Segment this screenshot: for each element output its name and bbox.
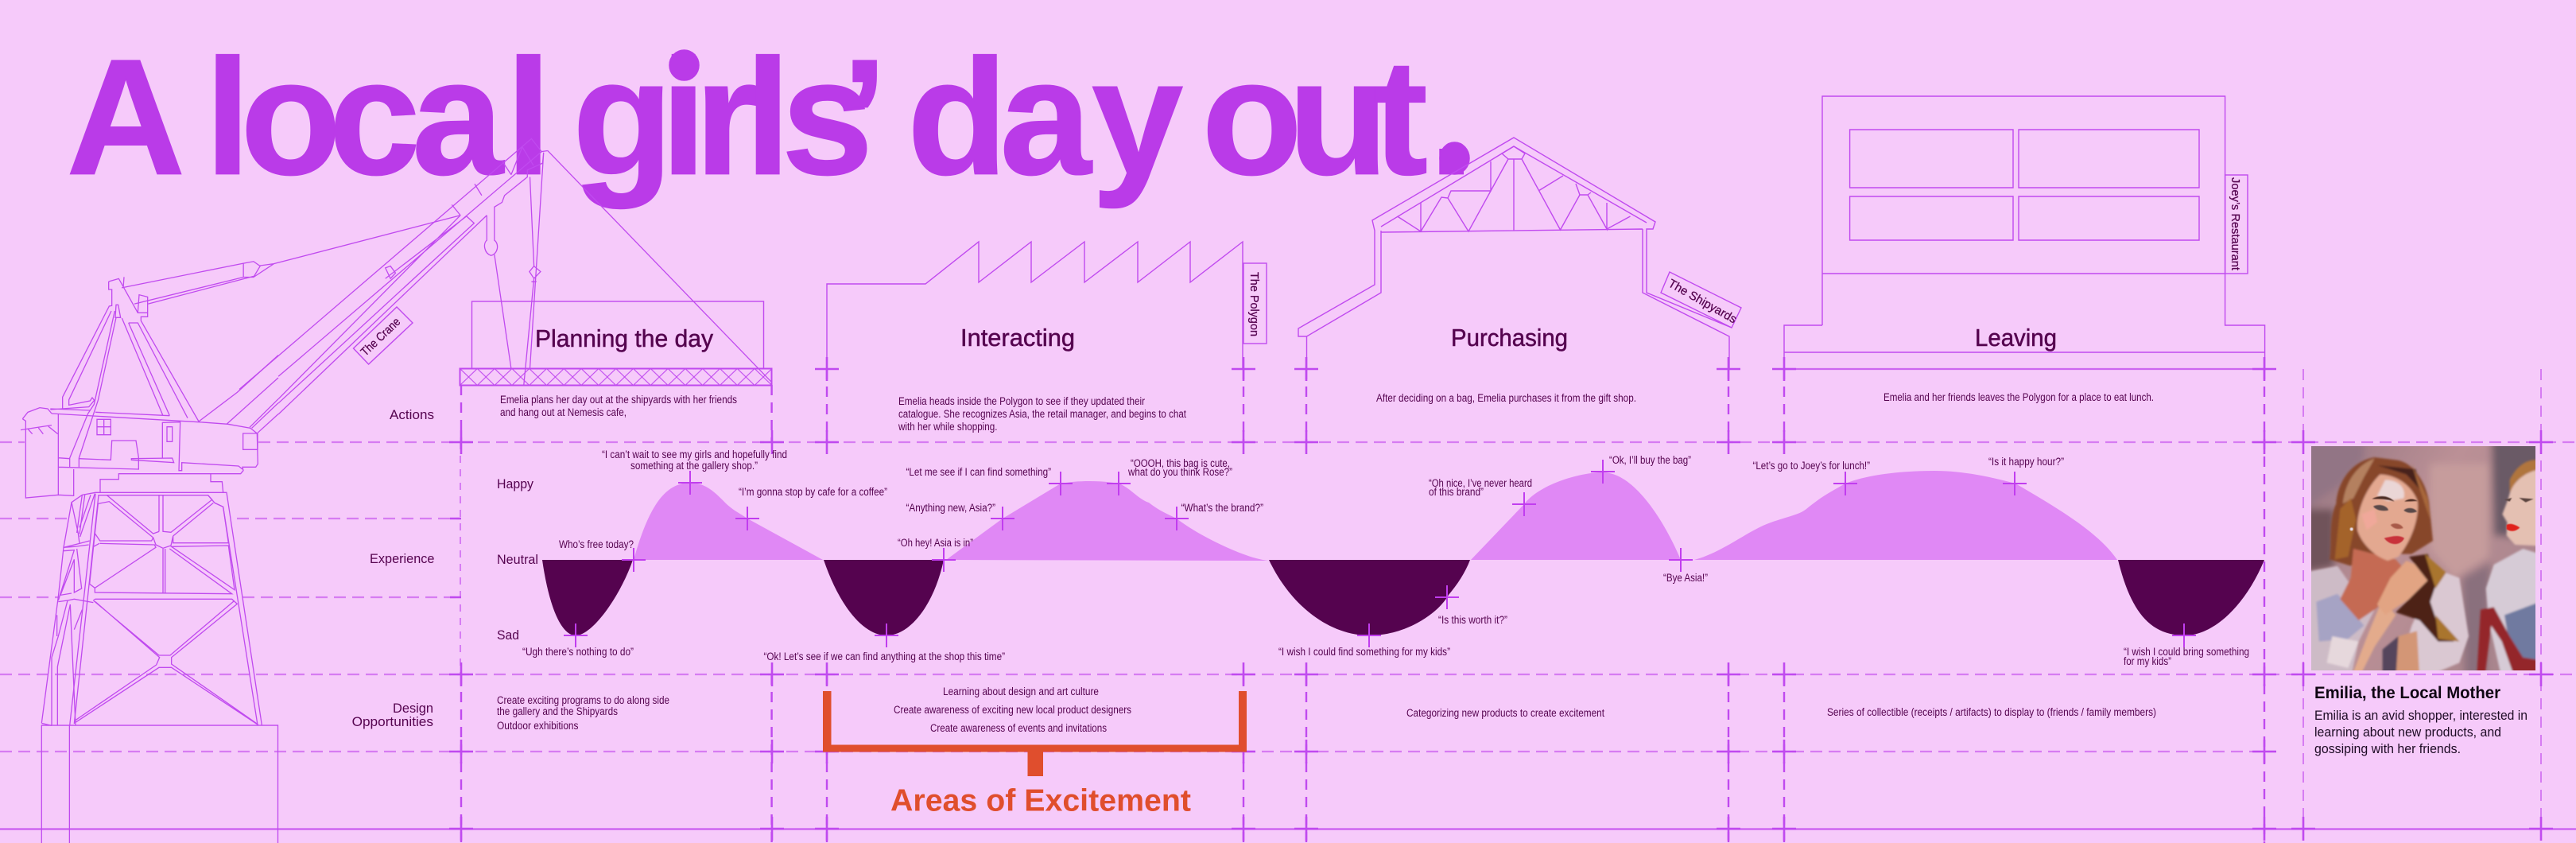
label: experience: Experience	[370, 551, 434, 566]
quote: interacting	[763, 457, 1263, 662]
action: interacting: with her while shopping.	[898, 421, 997, 433]
opportunity: purchasing: Categorizing new products to create excitement	[1406, 707, 1604, 719]
title: A	[67, 25, 185, 209]
quote: interacting: “Oh hey! Asia is in”	[898, 537, 973, 549]
quote: purchasing: “Is this worth it?”	[1438, 614, 1507, 626]
quote: leaving: “Let’s go to Joey’s for lunch!”	[1752, 460, 1870, 472]
crane tower	[41, 492, 262, 725]
action: leaving: Emelia and her friends leaves the Polygon for a place to eat lunch.	[1884, 391, 2154, 403]
panel: leaving	[1784, 96, 2265, 368]
opportunity: planning: Create exciting programs to do along side	[497, 694, 669, 706]
actions text	[500, 391, 2154, 433]
negative areas	[542, 560, 2264, 635]
quote: leaving	[1752, 456, 2249, 667]
action: interacting	[898, 395, 1186, 433]
panel: planning the day	[460, 301, 771, 385]
painted background	[2311, 446, 2535, 670]
quote: interacting: what do you think Rose?”	[1127, 466, 1232, 478]
persona caption	[2314, 683, 2528, 756]
opportunity: interacting: Create awareness of events and invitations	[930, 722, 1107, 734]
label: actions: Actions	[390, 407, 434, 422]
opportunity: interacting: Create awareness of exciting new local product designers	[894, 704, 1131, 716]
quote: interacting: “Ok! Let’s see if we can find anything at the shop this time”	[763, 651, 1005, 662]
persona description: learning about new products, and	[2314, 725, 2501, 740]
quote: planning: “I can’t wait to see my girls and hopefully find	[602, 449, 787, 460]
label: neutral: Neutral	[497, 552, 538, 567]
persona description: Emilia is an avid shopper, interested in	[2314, 709, 2528, 723]
second figure details	[2504, 498, 2534, 531]
sign: the shipyards: The Shipyards	[1666, 277, 1739, 326]
action: planning: Emelia plans her day out at the shipyards with her friends	[500, 394, 737, 406]
heading: Planning the day	[535, 324, 713, 352]
positive areas	[634, 471, 2117, 561]
lattice platform	[460, 369, 771, 385]
quote: purchasing: “I wish I could find something for my kids”	[1278, 646, 1450, 658]
planning box	[472, 301, 763, 369]
sign: The Crane: The Crane	[359, 315, 403, 359]
panel: purchasing	[1298, 138, 1741, 368]
callout label: Areas of Excitement	[890, 784, 1191, 818]
quote: leaving: “Is it happy hour?”	[1988, 456, 2064, 468]
action: interacting: catalogue. She recognizes Asia, the retail manager, and begins to chat	[898, 408, 1186, 420]
title: local	[205, 25, 552, 209]
design opportunities text	[497, 686, 2156, 734]
persona name: Emilia, the Local Mother	[2314, 683, 2501, 702]
face	[2357, 475, 2418, 561]
label: design opportunities: Opportunities	[352, 714, 433, 729]
action: planning: and hang out at Nemesis cafe,	[500, 406, 627, 418]
quote: interacting: “What’s the brand?”	[1181, 502, 1263, 514]
heading: Leaving	[1975, 324, 2057, 352]
row labels	[352, 407, 538, 729]
sign: the polygon	[1243, 263, 1267, 344]
main figure	[2303, 457, 2469, 678]
quote: purchasing: of this brand”	[1429, 486, 1484, 498]
sign: joey's restaurant: Joey’s Restaurant	[2229, 177, 2242, 271]
persona description	[2314, 709, 2528, 756]
quote: interacting: “Let me see if I can find something”	[906, 466, 1051, 478]
quote: interacting: “Anything new, Asia?”	[906, 502, 995, 514]
illustration: the crane	[21, 138, 772, 843]
quote: purchasing	[1278, 454, 1708, 658]
blouse	[2303, 566, 2375, 678]
quote: planning: Who’s free today?	[559, 538, 634, 550]
falling hair	[2396, 554, 2454, 642]
label: happy: Happy	[497, 476, 533, 491]
opportunity: leaving: Series of collectible (receipts / artifacts) to display to (friends / family members)	[1827, 706, 2156, 718]
title: day	[907, 25, 1183, 209]
callout: areas of excitement	[823, 691, 1247, 818]
persona description: gossiping with her friends.	[2314, 742, 2461, 756]
action: purchasing: After deciding on a bag, Emelia purchases it from the gift shop.	[1376, 392, 1636, 404]
title	[67, 25, 1475, 209]
neck and chest	[2339, 548, 2402, 621]
title: out.	[1202, 25, 1475, 209]
title: girls’	[572, 25, 887, 209]
label: sad: Sad	[497, 627, 519, 643]
second figure	[2477, 460, 2540, 678]
crane a-frame and machine house	[21, 277, 278, 498]
quote: purchasing: “Bye Asia!”	[1663, 572, 1708, 584]
quote: planning: something at the gallery shop.”	[630, 460, 758, 472]
quote: leaving: for my kids”	[2124, 655, 2171, 667]
roof truss	[1398, 146, 1630, 231]
panel: interacting	[827, 242, 1267, 368]
opportunity: planning: Outdoor exhibitions	[497, 720, 579, 732]
sign: the polygon: The Polygon	[1247, 272, 1261, 336]
sign: joey's restaurant	[2225, 175, 2248, 274]
opportunity: planning	[497, 694, 669, 732]
quote: interacting: “OOOH, this bag is cute,	[1131, 457, 1230, 469]
crane base, tie rods, boom and hook	[41, 138, 772, 843]
action: planning	[500, 394, 737, 418]
action: interacting: Emelia heads inside the Polygon to see if they updated their	[898, 395, 1145, 407]
quote: planning: “Ugh there’s nothing to do”	[522, 646, 634, 658]
label: design opportunities: Design	[393, 701, 433, 716]
quote: leaving: “I wish I could bring something	[2124, 646, 2249, 658]
experience chart	[522, 449, 2264, 667]
quote: planning: “I’m gonna stop by cafe for a coffee”	[739, 486, 887, 498]
persona portrait	[2311, 446, 2535, 670]
heading: Interacting	[960, 324, 1075, 352]
building: the polygon	[827, 242, 1243, 368]
facial details	[2350, 496, 2418, 544]
chart markers	[564, 460, 2196, 647]
opportunity: interacting	[894, 686, 1131, 734]
opportunity: planning: the gallery and the Shipyards	[497, 705, 618, 717]
quote: purchasing: “Oh nice, I’ve never heard	[1429, 477, 1532, 489]
restaurant window	[1850, 130, 2199, 240]
hand	[2377, 561, 2427, 615]
building: joey's restaurant	[1784, 96, 2265, 368]
bracket	[823, 691, 1247, 776]
building: the shipyards	[1298, 138, 1732, 368]
quote: planning	[522, 449, 887, 658]
quote: purchasing: “Ok, I’ll buy the bag”	[1609, 454, 1691, 466]
opportunity: interacting: Learning about design and art culture	[943, 686, 1099, 697]
heading: Purchasing	[1451, 324, 1568, 352]
hair	[2330, 457, 2433, 566]
quotes	[522, 449, 2249, 667]
label: design opportunities	[352, 701, 433, 729]
